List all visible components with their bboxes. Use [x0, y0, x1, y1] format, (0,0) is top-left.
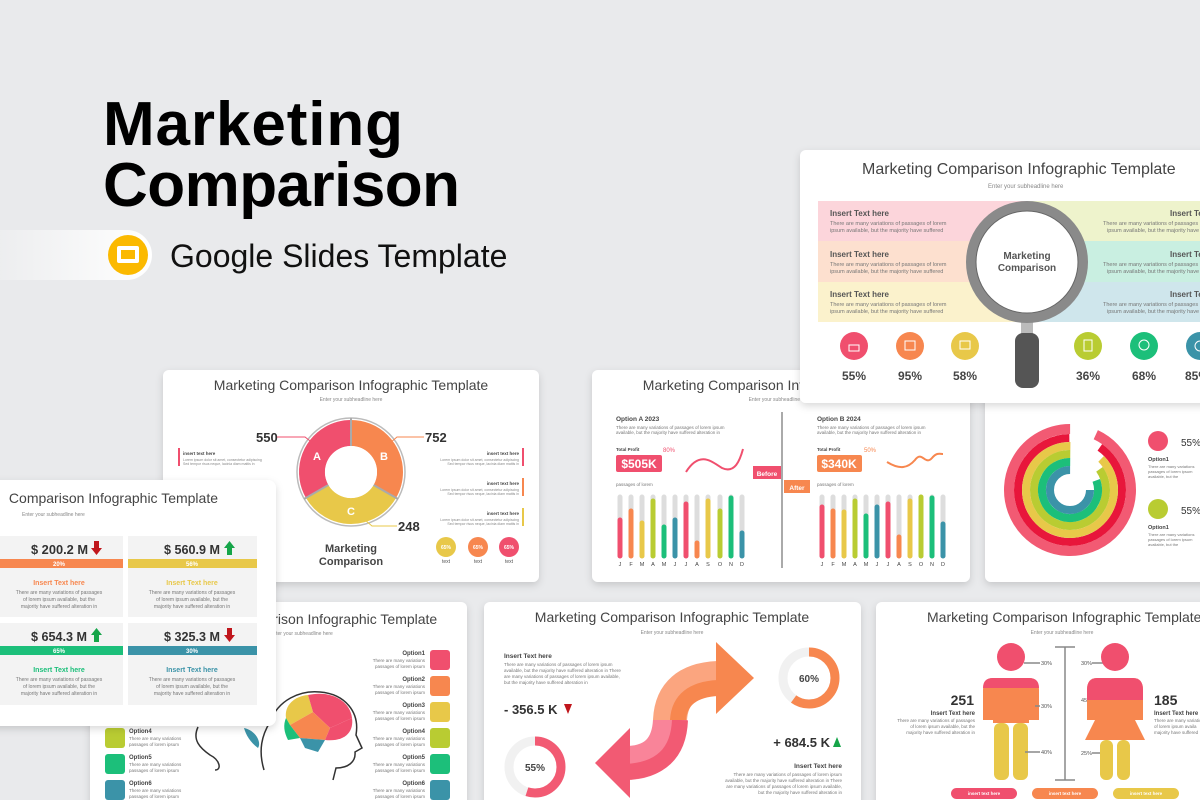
stat card 3: 65%: [53, 649, 66, 655]
option B: passages of lorem: [817, 482, 854, 487]
stat card 1: [0, 536, 123, 617]
panel: financial comparison slide: Comparison Infographic Template: [9, 490, 218, 506]
option items: Option1: [1148, 457, 1169, 463]
panel: concentric rings slide: [985, 370, 1200, 582]
panel: financial comparison slide: [0, 480, 276, 726]
right options: There are many variations: [373, 736, 426, 741]
option A: There are many variations of passages of lorem ipsum: [616, 425, 725, 430]
band texts: ipsum available, but the majority have suffered: [830, 228, 943, 234]
left options: Option5: [129, 755, 152, 761]
stat card 3: [0, 623, 123, 705]
stat card 2: [128, 536, 257, 617]
right options: There are many variations: [373, 710, 426, 715]
right text blocks: Lorem ipsum dolor sit amet, consectetur adipiscing: [440, 458, 519, 462]
right options: passages of lorem ipsum: [375, 768, 425, 773]
value up: + 684.5 K: [773, 735, 831, 750]
panel: before/after bar chart slide: M: [864, 562, 869, 568]
right text: Insert Text here: [794, 763, 842, 770]
panel: before/after bar chart slide: M: [640, 562, 645, 568]
stat card 4: 30%: [186, 649, 199, 655]
panel: before/after bar chart slide: A: [651, 562, 655, 568]
panel: before/after bar chart slide: M: [842, 562, 847, 568]
pills: insert text here: [1130, 791, 1163, 796]
option B: There are many variations of passages of lorem ipsum: [817, 425, 926, 430]
right text blocks: Sed tempor risus neque, lacinia diam mattis in: [447, 492, 519, 496]
right text: [725, 763, 842, 795]
right text blocks: [440, 448, 524, 526]
right text: but the majority have suffered alteration in: [758, 790, 842, 795]
donut chart ABC: C: [347, 506, 355, 518]
panel: before/after bar chart slide: N: [729, 562, 733, 568]
option items: passages of lorem ipsum: [1148, 537, 1193, 542]
option items: passages of lorem ipsum: [1148, 469, 1193, 474]
right options: There are many variations: [373, 658, 426, 663]
left text: [504, 653, 621, 685]
stat card 4: $ 325.3 M: [164, 629, 220, 644]
option A: $505K: [621, 457, 657, 471]
panel: before/after bar chart slide: D: [740, 562, 744, 568]
option A: Option A 2023: [616, 416, 660, 423]
panel: before/after bar chart slide: J: [619, 562, 622, 568]
stat card 2: of lorem ipsum available, but the: [156, 597, 228, 603]
left options: passages of lorem ipsum: [129, 794, 179, 799]
left text: Insert Text here: [504, 653, 552, 660]
pills: insert text here: [1049, 791, 1082, 796]
donut 55%: [509, 741, 561, 793]
band texts: ipsum available, but the majority have: [1107, 309, 1199, 315]
panel: donut ABC slide: Marketing: [325, 543, 377, 555]
donut chart ABC: [297, 418, 405, 526]
panel: before/after bar chart slide: M: [662, 562, 667, 568]
value labels: 550: [256, 430, 278, 445]
left text: but the majority have suffered alteration in: [504, 680, 588, 685]
panel: before/after bar chart slide: A: [897, 562, 901, 568]
right text: are many variations of passages of lorem ipsum available,: [726, 784, 842, 789]
right options: passages of lorem ipsum: [375, 794, 425, 799]
stat card 2: 56%: [186, 562, 199, 568]
option A: Total Profit: [616, 447, 640, 452]
panel: donut ABC slide: Comparison: [319, 556, 383, 568]
subtitle pill with google slides icon: Google Slides Template: [170, 238, 507, 274]
panel: before/after bar chart slide: O: [718, 562, 723, 568]
value labels: 248: [398, 519, 420, 534]
percent circles: [436, 537, 519, 565]
left options: There are many variations: [129, 788, 182, 793]
panel: arrows slide: Marketing Comparison Infographic Template: [535, 609, 809, 625]
value labels: [256, 430, 447, 534]
panel: people comparison slide: 40%: [1041, 750, 1052, 756]
left options: There are many variations: [129, 736, 182, 741]
panel: donut ABC slide: [163, 370, 539, 582]
icon circles with percentages: 95%: [898, 369, 922, 383]
donut chart ABC: B: [380, 451, 388, 463]
right options: Option2: [402, 677, 426, 683]
band texts: Insert Text here: [830, 209, 890, 218]
option B: $340K: [821, 457, 857, 471]
left text block: Sed tempor risus neque, lacinia diam mattis in: [183, 462, 255, 466]
percent circles: 65%: [504, 545, 515, 551]
band texts: ipsum available, but the majority have suffered: [830, 309, 943, 315]
stat card 2: majority have suffered alteration in: [154, 604, 230, 610]
right stat: 185: [1154, 692, 1178, 708]
main title: [103, 90, 460, 220]
stat card 2: $ 560.9 M: [164, 542, 220, 557]
stat card 4: Insert Text here: [166, 667, 218, 674]
panel: before/after bar chart slide: S: [706, 562, 710, 568]
option B: Option B 2024: [817, 416, 861, 423]
right text blocks: insert text here: [487, 481, 519, 486]
ring chart: [989, 409, 1151, 571]
stat card 3: majority have suffered alteration in: [21, 691, 97, 697]
value down: - 356.5 K: [504, 702, 558, 717]
band texts: Insert Text here: [830, 250, 890, 259]
left options: passages of lorem ipsum: [129, 742, 179, 747]
pills: insert text here: [968, 791, 1001, 796]
left stat: Insert Text here: [931, 711, 976, 717]
icon circles with percentages: [840, 332, 1200, 383]
bars B: [822, 497, 943, 556]
panel: arrows slide: [484, 602, 861, 800]
right options: passages of lorem ipsum: [375, 716, 425, 721]
panel: brain slide: Marketing Comparison Infographic Template: [163, 611, 437, 627]
right options: passages of lorem ipsum: [375, 742, 425, 747]
band texts: There are many variations of passages: [1103, 221, 1198, 227]
panel: before/after bar chart slide: O: [919, 562, 924, 568]
right text blocks: Lorem ipsum dolor sit amet, consectetur adipiscing: [440, 518, 519, 522]
option items: [1148, 431, 1200, 547]
right options: There are many variations: [373, 762, 426, 767]
right options: [373, 650, 450, 800]
right options: Option3: [402, 703, 426, 709]
panel: before/after bar chart slide: [592, 370, 970, 582]
panel: brain slide: Enter your subheadline here: [270, 631, 333, 637]
left options: There are many variations: [129, 762, 182, 767]
divider with before/after tags: [753, 412, 810, 568]
panel: donut ABC slide: Enter your subheadline here: [320, 397, 383, 403]
percent circles: text: [505, 559, 514, 565]
left stat: There are many variations of passages: [897, 718, 976, 723]
panel: before/after bar chart slide: Enter your subheadline here: [749, 397, 812, 403]
left stat: 251: [951, 692, 974, 708]
right options: Option1: [402, 651, 426, 657]
value labels: 752: [425, 430, 447, 445]
donut chart ABC: A: [313, 451, 321, 463]
panel: before/after bar chart slide: A: [695, 562, 699, 568]
right text blocks: insert text here: [487, 451, 519, 456]
donut 60%: [783, 652, 835, 704]
bands left: [818, 201, 1200, 322]
right stat: of lorem ipsum availa: [1154, 724, 1197, 729]
right stat: majority have suffered: [1154, 730, 1199, 735]
stat card 1: of lorem ipsum available, but the: [23, 597, 95, 603]
option items: There are many variations: [1148, 464, 1194, 469]
panel: people comparison slide: Marketing Comparison Infographic Template: [927, 609, 1200, 625]
stat card 2: There are many variations of passages: [149, 590, 236, 596]
panel: people comparison slide: Enter your subheadline here: [1031, 630, 1094, 636]
panel: people comparison slide: 25%: [1081, 751, 1092, 757]
right options: passages of lorem ipsum: [375, 690, 425, 695]
panel: magnifier slide: [800, 150, 1200, 403]
magnifier: Marketing: [1003, 251, 1051, 262]
band texts: There are many variations of passages of lorem: [830, 302, 947, 308]
panel: magnifier slide: Enter your subheadline here: [988, 184, 1064, 190]
stat card 1: There are many variations of passages: [16, 590, 103, 596]
left text block: Lorem ipsum dolor sit amet, consectetur adipiscing: [183, 458, 262, 462]
left options: Option6: [129, 781, 152, 787]
panel: before/after bar chart slide: N: [930, 562, 934, 568]
icon circles with percentages: 58%: [953, 369, 977, 383]
stat card 3: There are many variations of passages: [16, 677, 103, 683]
left text: There are many variations of passages of lorem ipsum: [504, 662, 613, 667]
divider with before/after tags: Before: [757, 471, 778, 478]
stat card 1: $ 200.2 M: [31, 542, 88, 557]
panel: people comparison slide: 30%: [1081, 661, 1092, 667]
right options: passages of lorem ipsum: [375, 664, 425, 669]
band texts: There are many variations of passages: [1103, 262, 1198, 268]
stat card 3: $ 654.3 M: [31, 629, 87, 644]
donut 55%: 55%: [525, 763, 545, 774]
option A: passages of lorem: [616, 482, 653, 487]
right stat: Insert Text here: [1154, 711, 1199, 717]
right options: There are many variations: [373, 684, 426, 689]
left options: passages of lorem ipsum: [129, 768, 179, 773]
panel: before/after bar chart slide: J: [685, 562, 688, 568]
left options: Option4: [129, 729, 152, 735]
panel: before/after bar chart slide: F: [831, 562, 835, 568]
heads and brain: [196, 692, 362, 780]
left text: available, but the majority have suffered alteration in There: [504, 668, 621, 673]
option B: 50%: [864, 448, 877, 454]
icon circles with percentages: 36%: [1076, 369, 1100, 383]
option items: available, but the: [1148, 542, 1179, 547]
right text blocks: Lorem ipsum dolor sit amet, consectetur adipiscing: [440, 488, 519, 492]
option B: [817, 416, 943, 487]
panel: people comparison slide: 30%: [1041, 704, 1052, 710]
right text blocks: Sed tempor risus neque, lacinia diam mattis in: [447, 522, 519, 526]
option B: Total Profit: [817, 447, 841, 452]
band texts: ipsum available, but the majority have: [1107, 269, 1199, 275]
stat card 4: majority have suffered alteration in: [154, 691, 230, 697]
left stat: [897, 692, 976, 735]
stat card 4: There are many variations of passages: [149, 677, 236, 683]
stat card 1: majority have suffered alteration in: [21, 604, 97, 610]
left text block: [178, 448, 262, 466]
right stat: [1154, 692, 1200, 735]
panel: before/after bar chart slide: S: [908, 562, 912, 568]
stat card 3: Insert Text here: [33, 667, 85, 674]
stat card 1: 20%: [53, 562, 66, 568]
stat card 4: [128, 623, 257, 705]
panel: financial comparison slide: Enter your subheadline here: [22, 512, 85, 518]
icon circles with percentages: 68%: [1132, 369, 1156, 383]
bars A: [620, 497, 742, 556]
right text: available, but the majority have suffered alteration in There: [725, 778, 842, 783]
right options: There are many variations: [373, 788, 426, 793]
main title: Comparison: [103, 151, 460, 220]
panel: before/after bar chart slide: J: [674, 562, 677, 568]
panel: before/after bar chart slide: A: [853, 562, 857, 568]
right text: There are many variations of passages of lorem ipsum: [733, 772, 842, 777]
magnifier: Comparison: [998, 263, 1056, 274]
band texts: [830, 209, 1200, 315]
panel: people comparison slide: [876, 602, 1200, 800]
panel: brain slide: [90, 602, 467, 800]
left options: [105, 728, 182, 800]
option items: Option1: [1148, 525, 1169, 531]
panel: people comparison slide: 30%: [1041, 661, 1052, 667]
stat card 1: Insert Text here: [33, 580, 85, 587]
right text blocks: Sed tempor risus neque, lacinia diam mattis in: [447, 462, 519, 466]
stat card 4: of lorem ipsum available, but the: [156, 684, 228, 690]
donut 60%: 60%: [799, 674, 819, 685]
left stat: majority have suffered alteration in: [906, 730, 975, 735]
option items: available, but the: [1148, 474, 1179, 479]
magnifier: [971, 206, 1083, 388]
right options: Option6: [402, 781, 426, 787]
panel: magnifier slide: Marketing Comparison Infographic Template: [862, 161, 1176, 178]
band texts: There are many variations of passages of lorem: [830, 221, 947, 227]
stat card 2: Insert Text here: [166, 580, 218, 587]
slide title: Marketing Comparison Infographic Template: [214, 377, 488, 393]
band texts: ipsum available, but the majority have suffered: [830, 269, 943, 275]
divider with before/after tags: After: [789, 485, 805, 492]
option A: available, but the majority have suffered alteration in: [616, 430, 720, 435]
left stat: of lorem ipsum available, but the: [910, 724, 975, 729]
panel: before/after bar chart slide: J: [887, 562, 890, 568]
panel: before/after bar chart slide: D: [941, 562, 945, 568]
panel: before/after bar chart slide: J: [876, 562, 879, 568]
option A: 80%: [663, 448, 676, 454]
band texts: There are many variations of passages: [1103, 302, 1198, 308]
subtitle pill with google slides icon: [0, 230, 507, 280]
right text blocks: insert text here: [487, 511, 519, 516]
icon circles with percentages: 55%: [842, 369, 866, 383]
pills: [951, 788, 1179, 799]
option A: [616, 416, 743, 487]
band texts: Insert Text here: [830, 290, 890, 299]
S arrow: [595, 642, 754, 798]
option B: available, but the majority have suffered alteration in: [817, 430, 921, 435]
man figure: [983, 643, 1039, 780]
stat card 3: of lorem ipsum available, but the: [23, 684, 95, 690]
band texts: ipsum available, but the majority have: [1107, 228, 1199, 234]
percent circles: 65%: [473, 545, 484, 551]
right options: Option4: [402, 729, 426, 735]
panel: before/after bar chart slide: J: [821, 562, 824, 568]
scale: [1024, 647, 1105, 780]
percent circles: text: [474, 559, 483, 565]
percent circles: text: [442, 559, 451, 565]
band texts: There are many variations of passages of lorem: [830, 262, 947, 268]
panel: people comparison slide: 45%: [1081, 698, 1092, 704]
panel: arrows slide: Enter your subheadline here: [641, 630, 704, 636]
panel: before/after bar chart slide: F: [629, 562, 633, 568]
right options: Option5: [402, 755, 426, 761]
left text: are many variations of passages of lorem ipsum available,: [504, 674, 620, 679]
main title: Marketing: [103, 90, 403, 159]
panel: before/after bar chart slide: Marketing Comparison Infographic Template: [643, 377, 917, 393]
percent circles: 65%: [441, 545, 452, 551]
left text block: insert text here: [183, 451, 216, 456]
woman figure: [1085, 643, 1145, 780]
option items: There are many variations: [1148, 532, 1194, 537]
